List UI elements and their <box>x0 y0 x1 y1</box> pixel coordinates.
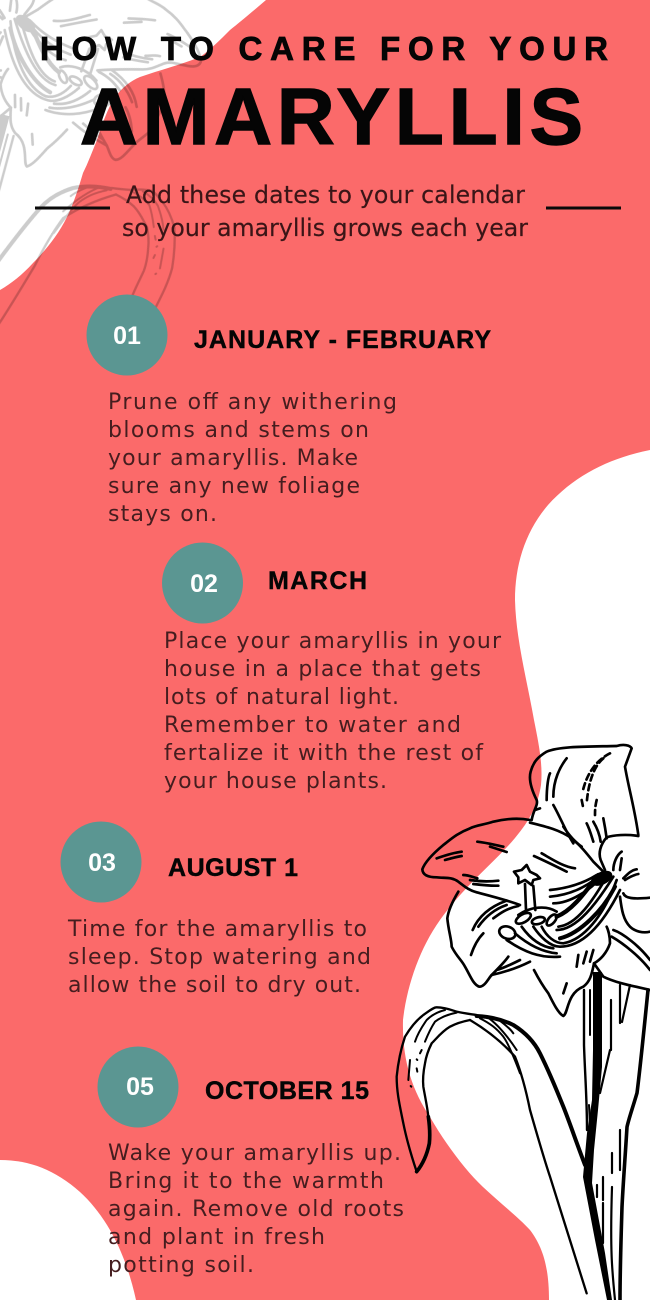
step 05: October 15: OCTOBER 15 <box>205 1077 369 1105</box>
step 03: August 1: 03 <box>88 849 116 877</box>
step 05: October 15: potting soil. <box>108 1253 254 1278</box>
step 03: August 1 <box>60 822 371 998</box>
step 03: August 1: AUGUST 1 <box>168 854 298 882</box>
step 03: August 1: Time for the amaryllis to <box>67 917 367 942</box>
step 05: October 15: Wake your amaryllis up. <box>108 1141 401 1166</box>
white blob: right side <box>403 450 650 1300</box>
subtitle with side rules <box>35 181 621 242</box>
step 02: March <box>162 542 502 794</box>
step 05: October 15: 05 <box>126 1073 154 1101</box>
grey flower illustration: top left <box>0 0 258 484</box>
step 01: January - February: blooms and stems on <box>108 418 369 443</box>
step 03: August 1: sleep. Stop watering and <box>68 945 371 970</box>
step 02: March: fertalize it with the rest of <box>164 741 484 766</box>
step 02: March: house in a place that gets <box>164 657 481 682</box>
step 05: October 15: again. Remove old roots <box>108 1197 404 1222</box>
step 01: January - February <box>86 294 491 527</box>
step 01: January - February: stays on. <box>108 502 217 527</box>
step 02: March: 02 <box>190 570 218 598</box>
step 02: March: MARCH <box>268 567 367 595</box>
step 05: October 15: and plant in fresh <box>108 1225 325 1250</box>
step 02: March: your house plants. <box>164 769 387 794</box>
step 01: January - February: Prune off any withering <box>108 390 397 415</box>
black flower illustration: bottom right <box>397 745 650 1300</box>
title <box>40 30 608 161</box>
subtitle with side rules: Add these dates to your calendar <box>126 181 525 209</box>
title: AMARYLLIS <box>80 72 583 161</box>
step 02: March: lots of natural light. <box>164 685 399 710</box>
step 03: August 1: allow the soil to dry out. <box>68 973 361 998</box>
step 05: October 15: Bring it to the warmth <box>108 1169 384 1194</box>
step 01: January - February: sure any new foliage <box>108 474 360 499</box>
subtitle with side rules: so your amaryllis grows each year <box>122 214 528 242</box>
title: HOW TO CARE FOR YOUR <box>40 30 608 67</box>
white blob: bottom left <box>0 1160 136 1300</box>
step 02: March: Place your amaryllis in your <box>164 629 502 654</box>
step 01: January - February: 01 <box>113 322 141 350</box>
step 01: January - February: JANUARY - FEBRUARY <box>194 326 491 354</box>
step 01: January - February: your amaryllis. Make <box>108 446 358 471</box>
white blob: top left <box>0 0 266 290</box>
step 05: October 15 <box>98 1046 404 1278</box>
step 02: March: Remember to water and <box>164 713 461 738</box>
